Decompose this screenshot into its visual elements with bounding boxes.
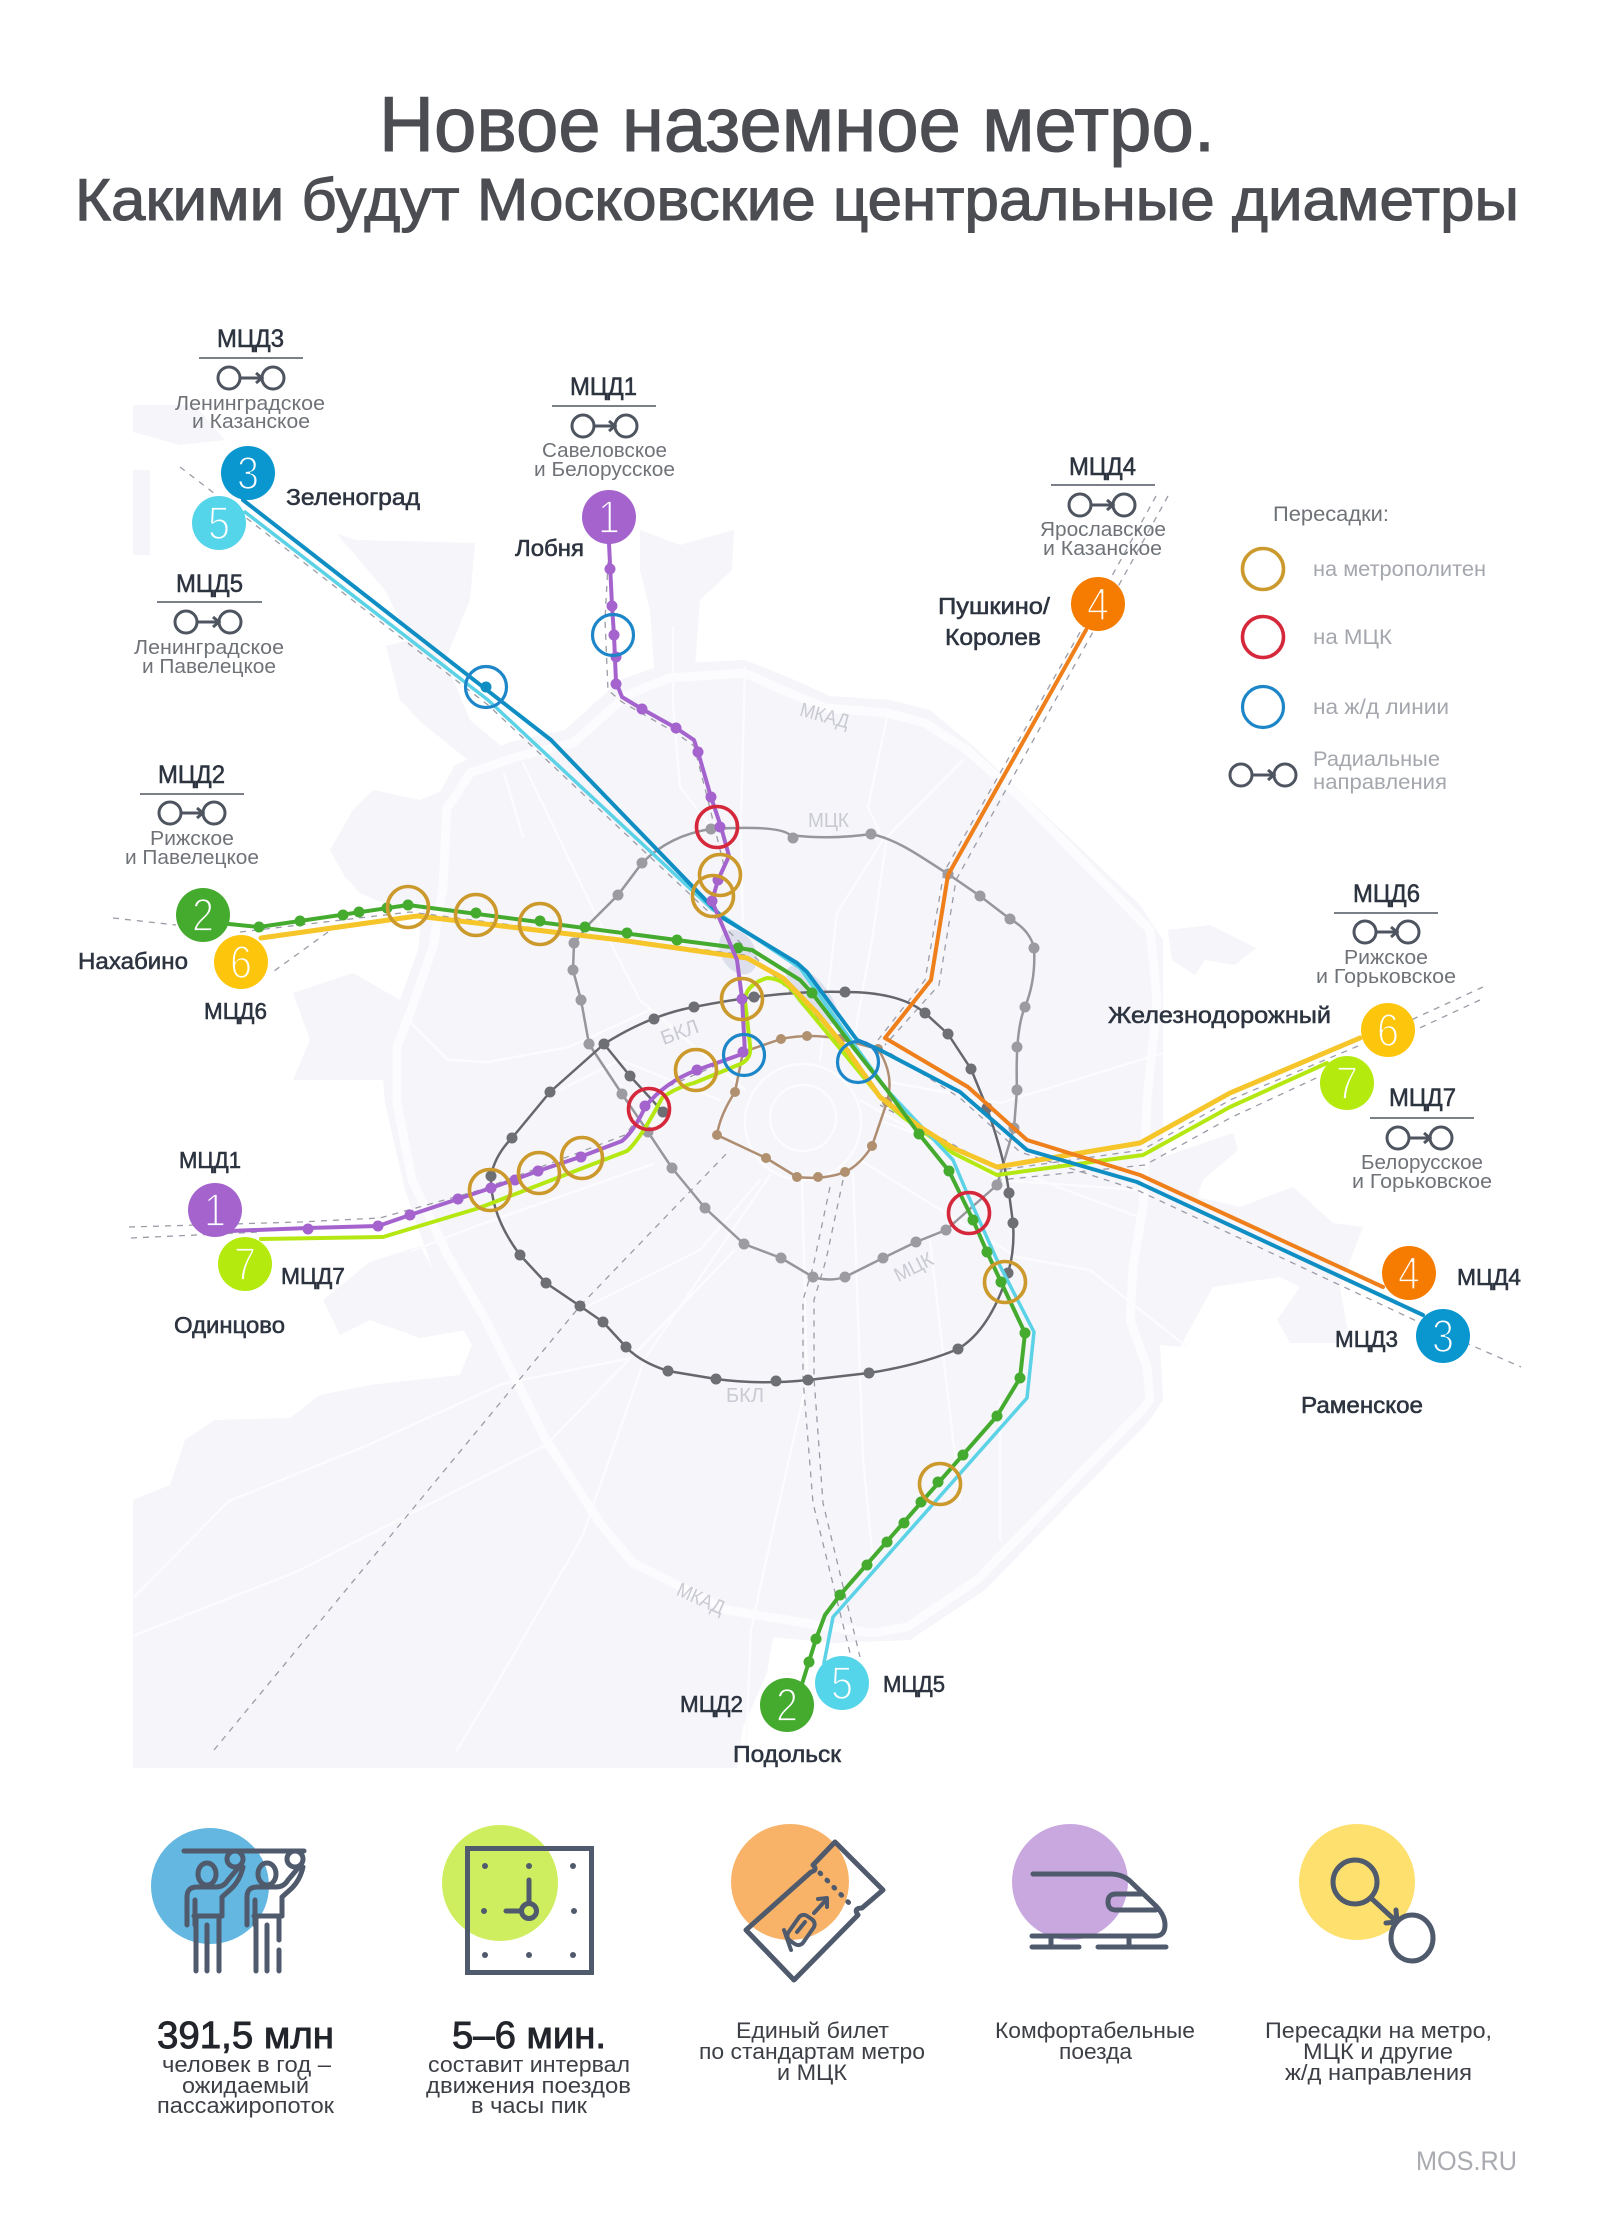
terminal: 2 Подольск [760, 1678, 814, 1732]
label block: МЦД1 north: и Белорусское [534, 459, 675, 481]
МЦД2 stations [254, 900, 1030, 1668]
stat: 391,5 млн: 391,5 млн [157, 2015, 334, 2057]
terminal: 5 Подольск [815, 1656, 869, 1710]
transfer rings: railway [466, 614, 878, 1082]
caption: passengers: пассажиропоток [157, 2093, 334, 2118]
label block: МЦД2: Рижское [150, 828, 234, 850]
terminal: 2 Нахабино: 2 [192, 889, 214, 941]
dashed railway lines [113, 467, 1521, 1750]
label block: МЦД4: МЦД4 [1069, 453, 1136, 481]
caption: interval [426, 2052, 631, 2118]
label block: МЦД5: МЦД5 [176, 570, 243, 598]
line: МЦД5 [245, 512, 1034, 1663]
station names [78, 484, 1423, 1767]
icon: ticket [731, 1824, 883, 1980]
terminal: 4 Пушкино: 4 [1087, 578, 1109, 630]
terminal: 2 Подольск: 2 [776, 1679, 798, 1731]
line names at terminals: МЦД3 [1335, 1326, 1398, 1352]
caption: ticket: Единый билет [736, 2018, 889, 2043]
fact: single ticket [699, 1824, 925, 2085]
МЦД1 stations [302, 564, 748, 1234]
label block: МЦД4 [1040, 453, 1166, 560]
fact: transfers [1265, 1824, 1492, 2085]
caption: ticket: и МЦК [777, 2060, 847, 2085]
terminal: 5 Подольск: 5 [831, 1657, 853, 1709]
station names: Подольск [733, 1741, 842, 1767]
legend item: МЦК: на МЦК [1313, 626, 1393, 649]
minor roads [133, 627, 1187, 1768]
label block: МЦД5: и Павелецкое [142, 656, 276, 678]
caption: passengers: ожидаемый [182, 2073, 309, 2098]
line names at terminals [179, 998, 1521, 1717]
line: МЦД3 [243, 500, 1423, 1315]
map background [133, 405, 1363, 1768]
legend item: МЦК [1242, 616, 1393, 658]
label block: МЦД4: Ярославское [1040, 519, 1166, 541]
terminal: 3 Зеленоград [221, 446, 275, 500]
terminal: 4 Пушкино [1071, 577, 1125, 631]
caption: passengers [157, 2052, 334, 2118]
icon: clock [442, 1825, 592, 1972]
legend item: radial directions: Радиальные [1313, 748, 1440, 771]
terminal: 1 Одинцово: 1 [204, 1184, 226, 1236]
terminal: 3 Раменское [1416, 1309, 1470, 1363]
icon: passengers [151, 1828, 304, 1971]
label block: МЦД5 [134, 570, 284, 678]
legend item: metro [1242, 548, 1486, 590]
label block: МЦД2 [125, 761, 259, 869]
line: МЦД1 [230, 543, 748, 1234]
line names at terminals: МЦД4 [1457, 1264, 1521, 1290]
transfer rings: МЦК [628, 806, 990, 1234]
title: Какими будут Московские центральные диаметры [75, 167, 1519, 233]
fact: interval [426, 1825, 631, 2118]
terminal: 1 Лобня [582, 490, 636, 544]
legend item: radial directions: направления [1313, 771, 1447, 794]
terminal: 6 Нахабино: 6 [230, 936, 252, 988]
terminal: 1 Одинцово [188, 1183, 242, 1237]
legend item: railway [1242, 686, 1449, 728]
legend item: metro: на метрополитен [1313, 558, 1486, 581]
fact: passengers [151, 1828, 334, 2118]
source: MOS.RU: MOS.RU [1416, 2146, 1517, 2176]
line names at terminals: МЦД7 [281, 1263, 345, 1289]
caption: interval: движения поездов [426, 2073, 631, 2098]
label block: МЦД7: МЦД7 [1389, 1084, 1456, 1112]
caption: passengers: человек в год – [162, 2052, 332, 2077]
label block: МЦД2: и Павелецкое [125, 847, 259, 869]
МЦК stations [568, 824, 1040, 1282]
line: МЦД2 [229, 900, 1030, 1684]
line: МЦД4 [885, 630, 1383, 1287]
caption: trains: Комфортабельные [995, 2018, 1195, 2043]
line: МЦД6 [261, 916, 1360, 1167]
terminal: 4 Раменское: 4 [1398, 1247, 1420, 1299]
legend item: radial directions [1230, 748, 1447, 794]
terminal: 4 Раменское [1382, 1246, 1436, 1300]
line names at terminals: МЦД6 [204, 998, 267, 1024]
label block: МЦД3: МЦД3 [217, 325, 284, 353]
station: МЦД3 interchange dot [480, 682, 492, 692]
legend item: railway: на ж/д линии [1313, 696, 1449, 719]
line names at terminals: МЦД5 [883, 1671, 945, 1697]
label block: МЦД1 north: Савеловское [542, 440, 667, 462]
caption: transfers: МЦК и другие [1303, 2039, 1453, 2064]
line: МЦК ring [568, 824, 1040, 1282]
stat: 5–6 мин.: 5–6 мин. [452, 2015, 606, 2057]
legend: transfers: Пересадки: [1273, 503, 1389, 526]
terminal: 6 Нахабино [214, 935, 268, 989]
station names: Железнодорожный [1108, 1002, 1331, 1028]
line: МЦД7 [261, 978, 1327, 1239]
label block: МЦД7: Белорусское [1361, 1152, 1483, 1174]
caption: transfers: ж/д направления [1285, 2060, 1472, 2085]
map label: МЦК south: МЦК [891, 1248, 937, 1287]
label block: МЦД6: Рижское [1344, 947, 1428, 969]
map label: МЦК north: МЦК [808, 810, 849, 832]
caption: interval: в часы пик [471, 2093, 587, 2118]
label block: МЦД6: и Горьковское [1316, 966, 1456, 988]
station names: Пушкино/ [938, 593, 1051, 619]
caption: transfers [1265, 2018, 1492, 2085]
terminal: 5 Зеленоград: 5 [208, 497, 230, 549]
transfer rings: metro [388, 854, 1026, 1504]
Кольцевая stations [712, 1031, 892, 1182]
caption: transfers: Пересадки на метро, [1265, 2018, 1492, 2043]
terminal: 2 Нахабино [176, 888, 230, 942]
label block: МЦД7: и Горьковское [1352, 1171, 1492, 1193]
title: Новое наземное метро. [379, 80, 1215, 168]
caption: trains: поезда [1059, 2039, 1133, 2064]
terminal: 6 Железнодорожный: 6 [1377, 1004, 1399, 1056]
label block: МЦД7 [1352, 1084, 1492, 1193]
caption: interval: составит интервал [428, 2052, 630, 2077]
map label: МКАД south: МКАД [673, 1579, 728, 1620]
legend: transfers [1230, 503, 1486, 794]
icon: transfer [1299, 1824, 1433, 1961]
line names at terminals: МЦД1 [179, 1147, 241, 1173]
terminal: 3 Раменское: 3 [1432, 1310, 1454, 1362]
terminal: 7 Одинцово: 7 [234, 1238, 256, 1290]
station names: Одинцово [174, 1312, 285, 1338]
caption: ticket [699, 2018, 925, 2085]
terminal: 7 Железнодорожный: 7 [1336, 1057, 1358, 1109]
label block: МЦД3: и Казанское [192, 411, 310, 433]
terminal: 5 Зеленоград [192, 496, 246, 550]
map label: БКЛ south: БКЛ [726, 1385, 764, 1407]
station names: Раменское [1301, 1392, 1423, 1418]
terminal: 7 Одинцово [218, 1237, 272, 1291]
label block: МЦД1 north: МЦД1 [570, 373, 637, 401]
fact: comfortable trains [995, 1824, 1195, 2064]
map label: МКАД north: МКАД [797, 699, 852, 733]
junction halos [711, 923, 847, 1032]
caption: ticket: по стандартам метро [699, 2039, 925, 2064]
label block: МЦД6 [1316, 880, 1456, 988]
terminal: 6 Железнодорожный [1361, 1003, 1415, 1057]
label block: МЦД3: Ленинградское [175, 393, 325, 415]
caption: trains [995, 2018, 1195, 2064]
line names at terminals: МЦД2 [680, 1691, 743, 1717]
label block: МЦД5: Ленинградское [134, 637, 284, 659]
terminal: 1 Лобня: 1 [598, 491, 620, 543]
line: БКЛ ring [486, 986, 1018, 1386]
station names: Зеленоград [286, 484, 421, 510]
MKAD road [397, 673, 1157, 1633]
label block: МЦД1 north [534, 373, 675, 481]
label block: МЦД3 [175, 325, 325, 433]
map label: БКЛ west: БКЛ [658, 1016, 702, 1050]
label block: МЦД6: МЦД6 [1353, 880, 1420, 908]
label block: МЦД4: и Казанское [1043, 538, 1162, 560]
station names: Нахабино [78, 948, 188, 974]
terminal: 7 Железнодорожный [1320, 1056, 1374, 1110]
station names: Королев [945, 624, 1041, 650]
БКЛ stations [486, 986, 1018, 1386]
line: Кольцевая [712, 1031, 892, 1182]
title [75, 80, 1519, 233]
label block: МЦД2: МЦД2 [158, 761, 225, 789]
terminal: 3 Зеленоград: 3 [237, 447, 259, 499]
icon: train [1012, 1824, 1166, 1947]
station names: Лобня [515, 535, 584, 561]
